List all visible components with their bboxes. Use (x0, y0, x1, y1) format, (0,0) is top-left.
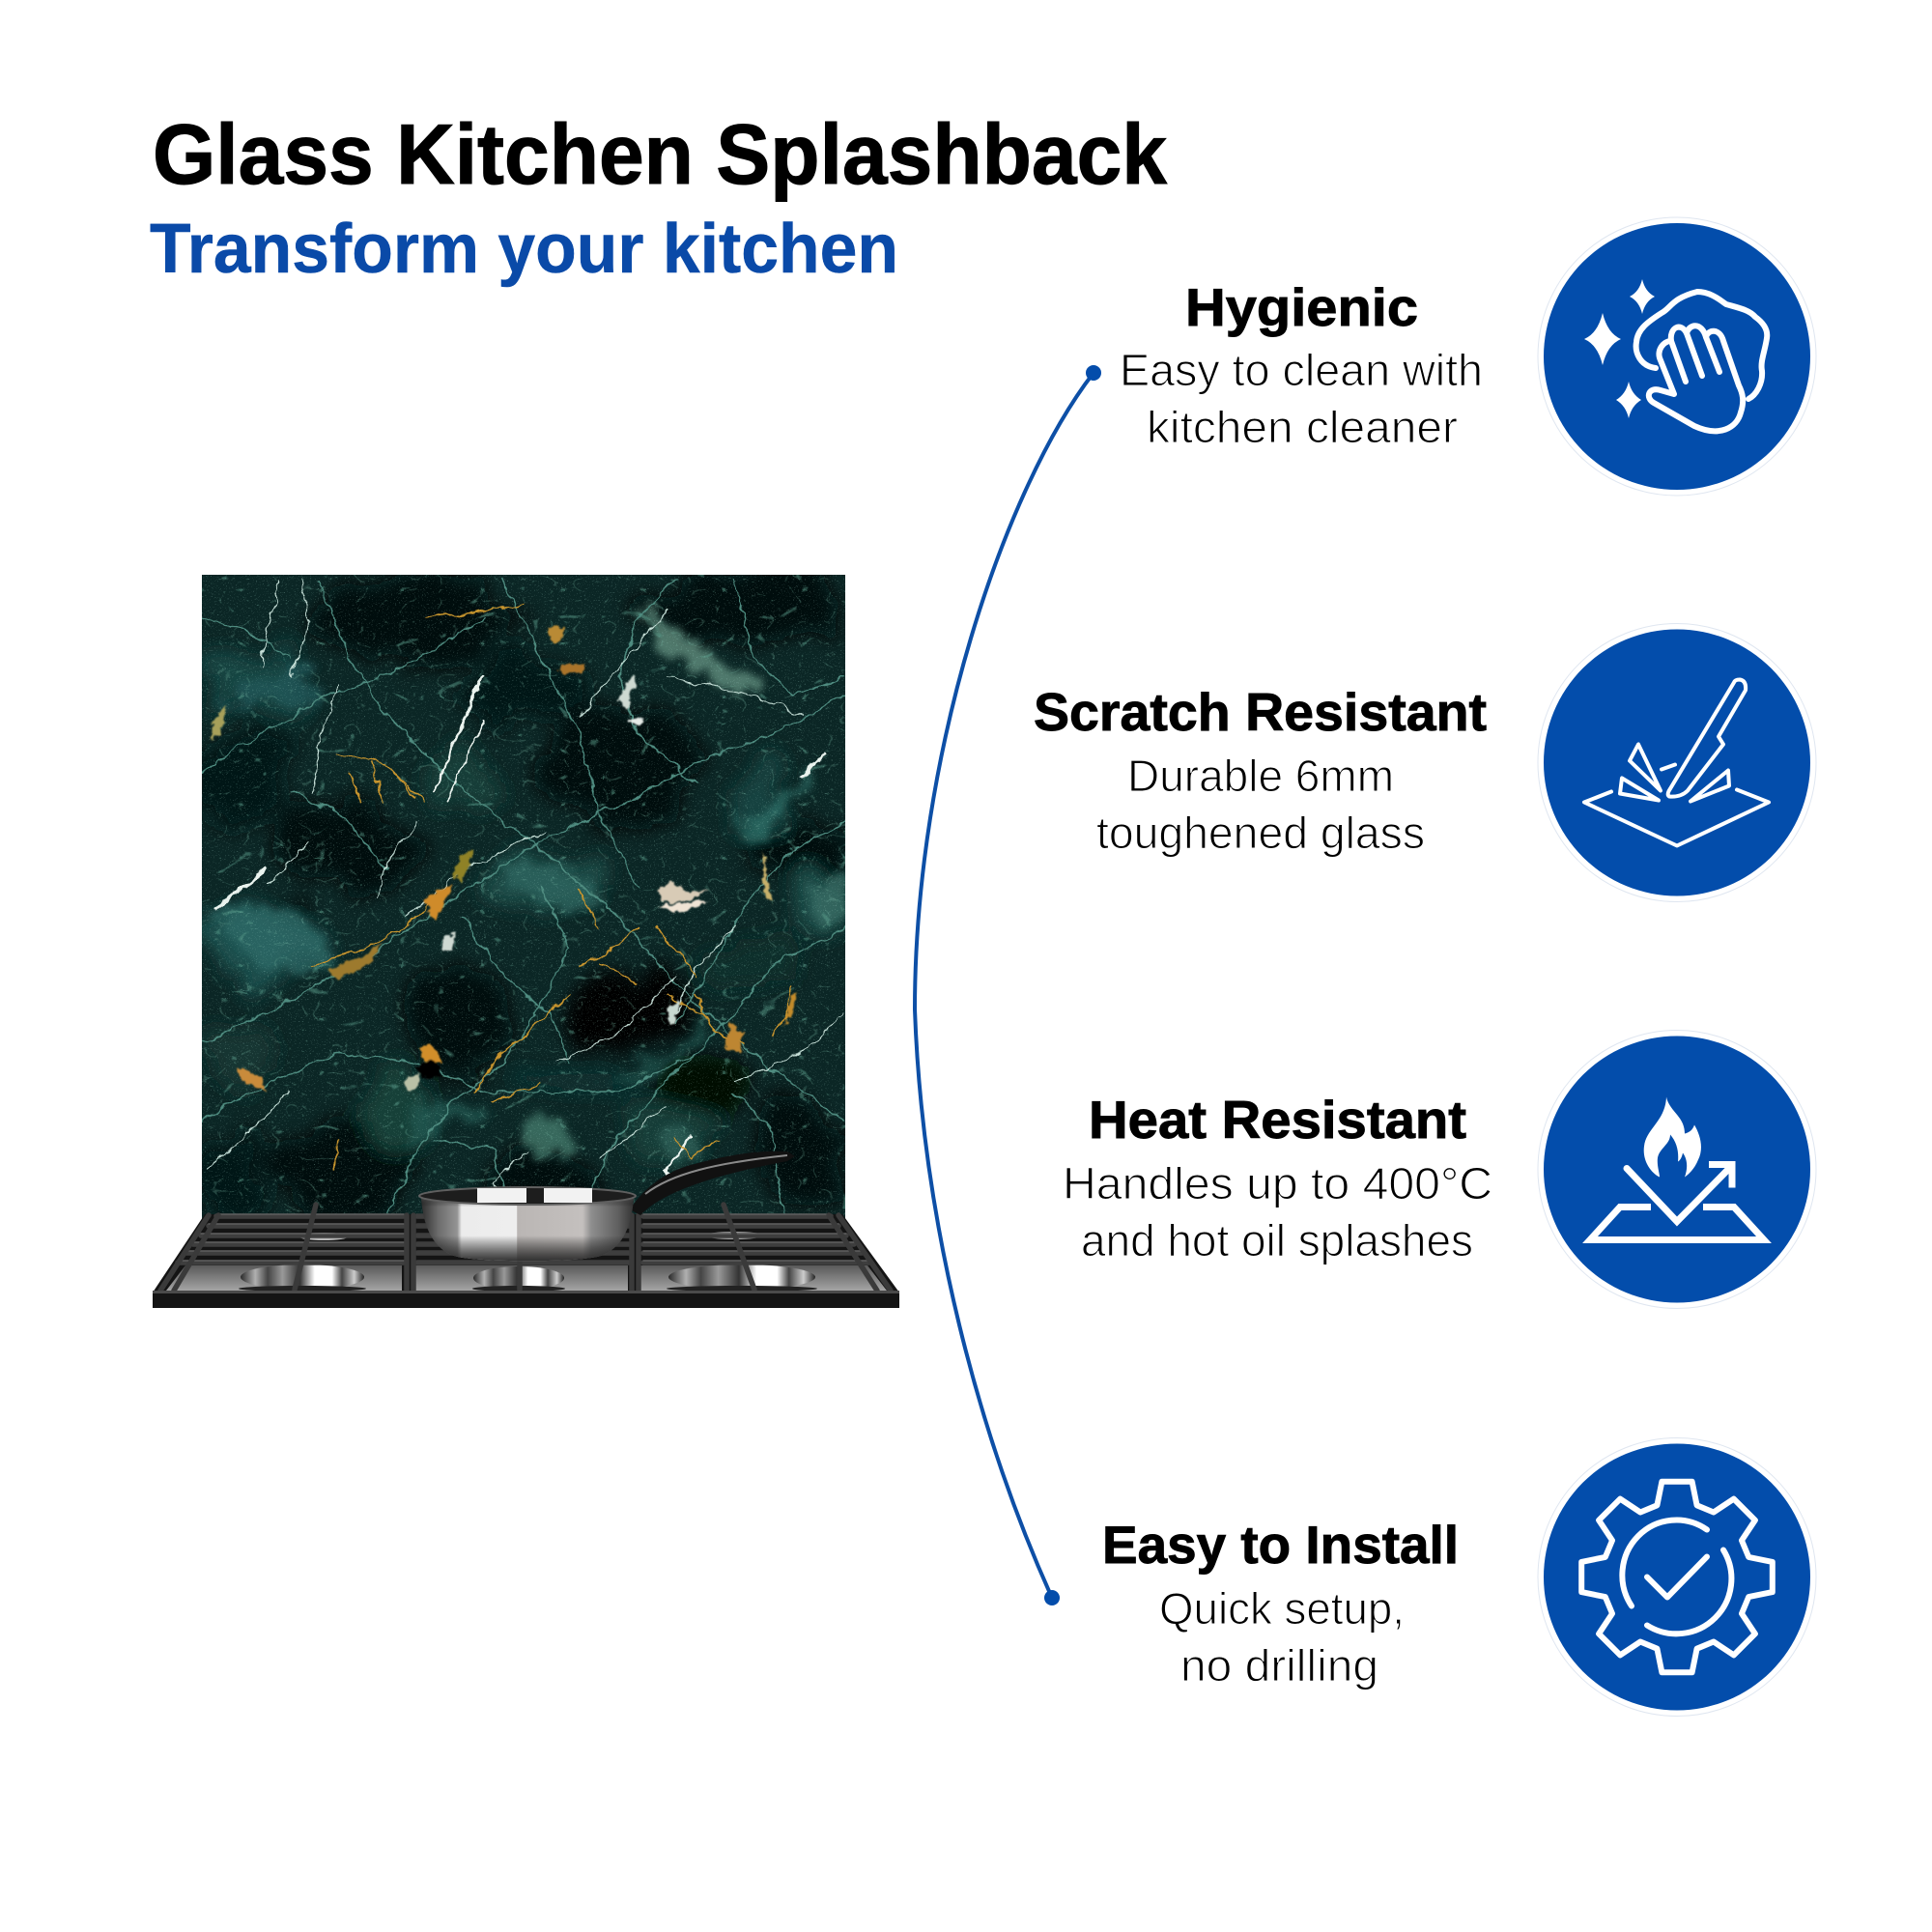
pan handle highlight (645, 1155, 787, 1194)
description: Durable 6mm (1127, 751, 1394, 801)
lighter marble bands (206, 609, 845, 1169)
hob front edge (153, 1291, 899, 1308)
hob steel plates (166, 1265, 887, 1291)
pan bowl shading (421, 1198, 634, 1261)
feature: scratch resistant (1034, 682, 1487, 858)
description: Quick setup, (1159, 1583, 1405, 1634)
feature: easy to install (1102, 1515, 1459, 1690)
gold and white mineral patches (211, 626, 797, 1090)
description (1159, 1583, 1405, 1690)
gas hob (153, 1205, 899, 1308)
feature: heat resistant (1063, 1090, 1492, 1265)
marble glass splashback panel (198, 570, 855, 1222)
description: and hot oil splashes (1081, 1215, 1473, 1265)
connector bottom dot (1044, 1590, 1060, 1605)
icon: flame deflected from surface (1538, 1030, 1816, 1308)
title: Glass Kitchen Splashback (153, 106, 1168, 202)
pan reflections (477, 1188, 592, 1203)
pan handle (630, 1151, 795, 1215)
heading: Easy to Install (1102, 1515, 1459, 1575)
description: kitchen cleaner (1147, 402, 1458, 452)
pan bowl (421, 1198, 634, 1261)
cast-iron grates (160, 1205, 891, 1291)
connector top dot (1086, 365, 1101, 381)
burners (239, 1232, 817, 1292)
heading: Heat Resistant (1089, 1090, 1466, 1150)
description (1096, 751, 1425, 858)
pan rim (419, 1187, 636, 1205)
marble veins (202, 575, 845, 1222)
description: no drilling (1180, 1640, 1378, 1690)
curved connector line (915, 365, 1101, 1605)
icon: knife scratching glass (1538, 624, 1816, 902)
description (1120, 345, 1483, 452)
description: toughened glass (1096, 808, 1425, 858)
heading: Scratch Resistant (1034, 682, 1487, 742)
description (1063, 1158, 1492, 1265)
description: Handles up to 400°C (1063, 1158, 1492, 1208)
frying pan (419, 1151, 795, 1261)
icon: hand wiping with sparkles (1538, 217, 1816, 496)
icon: gear with check mark (1538, 1437, 1816, 1716)
heading: Hygienic (1185, 277, 1418, 337)
description: Easy to clean with (1120, 345, 1483, 395)
subtitle: Transform your kitchen (150, 211, 898, 288)
product illustration: splashback and hob (153, 570, 899, 1308)
feature: hygienic (1120, 277, 1483, 452)
